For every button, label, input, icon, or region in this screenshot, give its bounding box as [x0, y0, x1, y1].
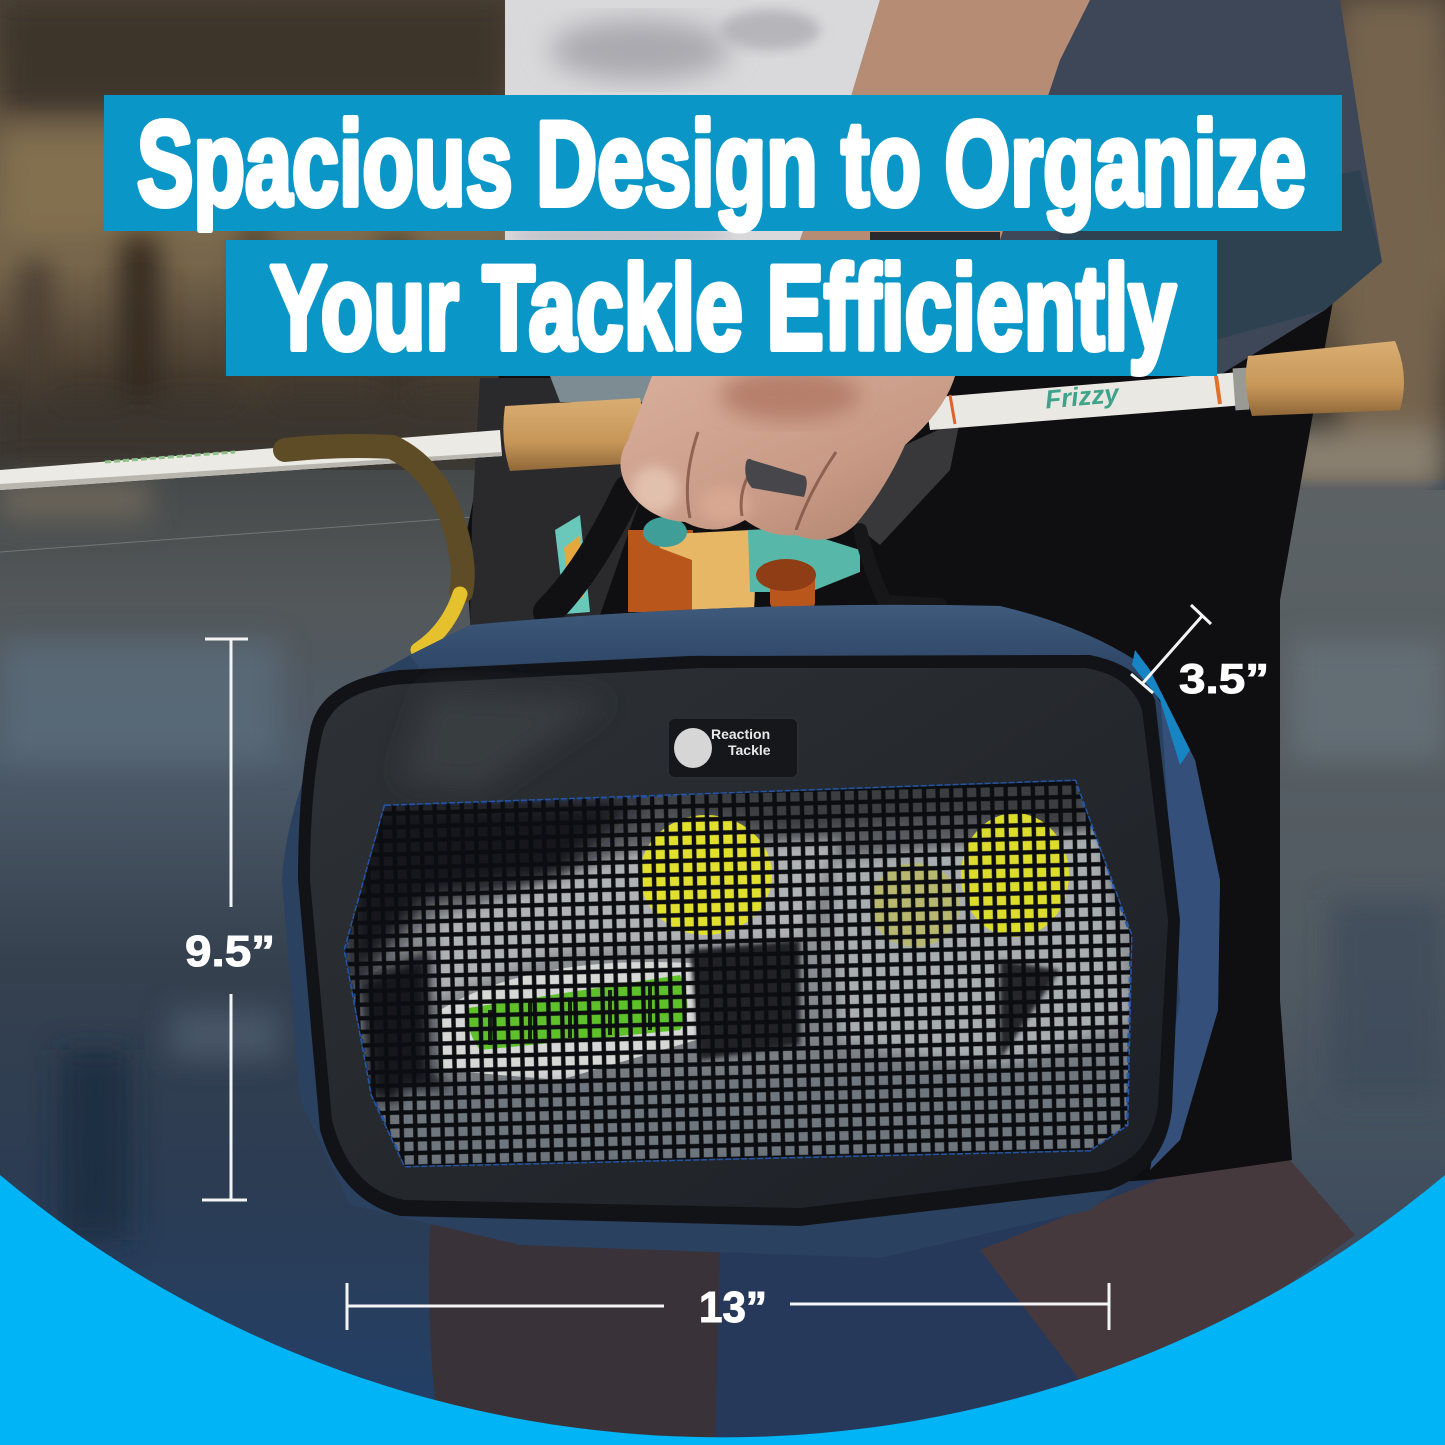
fishing rod: right blank: Frizzy [1044, 378, 1121, 414]
person: light camo shirt [505, 0, 880, 246]
bag: right side panel [1150, 690, 1220, 1170]
fishing rod: left cork handle [503, 398, 644, 471]
bag: brand patch: Tackle [728, 742, 771, 758]
soft plastic worm lure [285, 446, 463, 650]
dimension: depth 3.5 inches: 3.5” [1179, 655, 1269, 702]
mesh contents: green lure label [468, 975, 688, 1050]
background: blurred shoreline [0, 0, 1445, 490]
person: legs [429, 1160, 1355, 1445]
dimension: width 13 inches [347, 1283, 1109, 1332]
dimension: width 13 inches: 13” [699, 1283, 767, 1332]
dimension: height 9.5 inches: 9.5” [185, 927, 275, 976]
fishing rod: right blank [925, 368, 1249, 430]
mesh contents: lure boxes [345, 781, 1130, 1166]
bag handle strap [548, 490, 940, 612]
bag: blue zipper pull [1132, 650, 1190, 765]
person: shorts fabric near hand [855, 420, 960, 545]
background: river water [0, 470, 1445, 1445]
fishing reel [555, 515, 860, 614]
fishing rod: right cork handle [1246, 341, 1404, 416]
dimension: height 9.5 inches [185, 639, 275, 1200]
mesh contents: yellow lure label right [870, 813, 1069, 947]
bag: brand patch [668, 718, 798, 778]
person: black shorts [465, 290, 1335, 1200]
shirt bottom piece [550, 376, 680, 402]
mesh contents: yellow lure label left [640, 815, 772, 935]
bag: brand patch: Reaction [711, 726, 770, 742]
dimension: depth 3.5 inches [1131, 605, 1269, 702]
mesh grid [330, 770, 1150, 1180]
bag: mesh window [330, 770, 1150, 1180]
hand gripping handle [620, 369, 955, 540]
person: dark blue t-shirt side [1000, 0, 1382, 378]
tackle bag [282, 605, 1220, 1258]
person: t-shirt hem [1050, 170, 1382, 340]
person: shorts left highlight [470, 378, 650, 625]
bag: front panel [310, 668, 1168, 1208]
bag: zipper and black trim [298, 655, 1180, 1226]
bright blue curved footer [0, 1175, 1445, 1445]
bag: top flap [410, 605, 1135, 680]
person: forearm [800, 0, 1090, 240]
fishing rod: left blank [0, 430, 502, 490]
bag: blue back body [282, 605, 1220, 1258]
person: watch band [870, 232, 1000, 240]
bag: soft fabric shading [400, 690, 610, 790]
